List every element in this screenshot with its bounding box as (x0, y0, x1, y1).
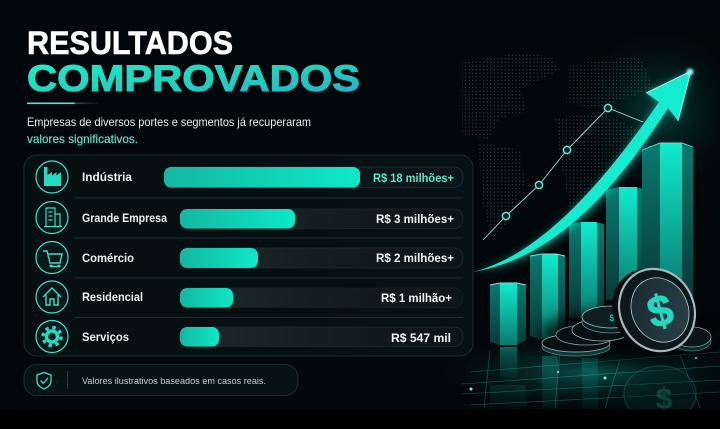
row: Residencial (36, 281, 463, 313)
subtitle: Empresas de diversos portes e segmentos já recuperaram (27, 115, 311, 129)
footnote pill (24, 364, 298, 396)
floor light points (470, 357, 697, 390)
bar 3 (569, 222, 604, 318)
row: Indústria: R$ 18 milhões+ (373, 171, 454, 185)
icon: building (36, 202, 68, 234)
coin stack (542, 306, 711, 356)
bar 5 (642, 143, 693, 296)
bar 4 (606, 187, 644, 300)
accent line (27, 102, 98, 104)
row: Serviços: R$ 547 mil (391, 331, 451, 345)
row: Grande Empresa: Grande Empresa (82, 211, 167, 225)
footnote pill: Valores ilustrativos baseados em casos reais. (82, 376, 266, 386)
title: COMPROVADOS (27, 57, 360, 99)
3D bars (490, 143, 693, 345)
title: RESULTADOS (27, 25, 233, 61)
line chart with markers (483, 104, 643, 240)
bar reflections (490, 347, 598, 409)
subtitle: valores significativos. (27, 132, 138, 146)
icon: cart (36, 242, 68, 274)
growth arrow (473, 68, 694, 272)
row: Residencial: R$ 1 milhão+ (381, 291, 452, 305)
world map of dots (462, 52, 655, 240)
row: Serviços (36, 320, 463, 352)
row: Serviços: Serviços (82, 330, 129, 344)
coin shadow (540, 309, 710, 361)
coin stack: $ (609, 313, 615, 323)
row: Indústria (36, 161, 463, 193)
icon: shield (37, 372, 51, 389)
row: Grande Empresa (36, 202, 463, 234)
row: Residencial: Residencial (82, 290, 143, 304)
large dollar coin: $ (642, 285, 679, 338)
row: Comércio: Comércio (82, 251, 134, 265)
row: Indústria: Indústria (82, 170, 132, 184)
floor grid (462, 350, 720, 408)
bar 2 (530, 254, 565, 340)
row: Comércio: R$ 2 milhões+ (376, 251, 454, 265)
coin reflection (624, 366, 696, 422)
title (27, 25, 360, 99)
bottom band (0, 409, 720, 429)
icon: house (36, 281, 68, 313)
bar 1 (490, 283, 526, 345)
subtitle (27, 115, 311, 146)
coin reflection: $ (656, 383, 673, 416)
panel: results list (24, 155, 473, 356)
icon: factory (36, 161, 68, 193)
row: Comércio (36, 242, 463, 274)
large dollar coin (599, 256, 708, 364)
icon: gear (36, 320, 68, 352)
row: Grande Empresa: R$ 3 milhões+ (376, 212, 454, 226)
